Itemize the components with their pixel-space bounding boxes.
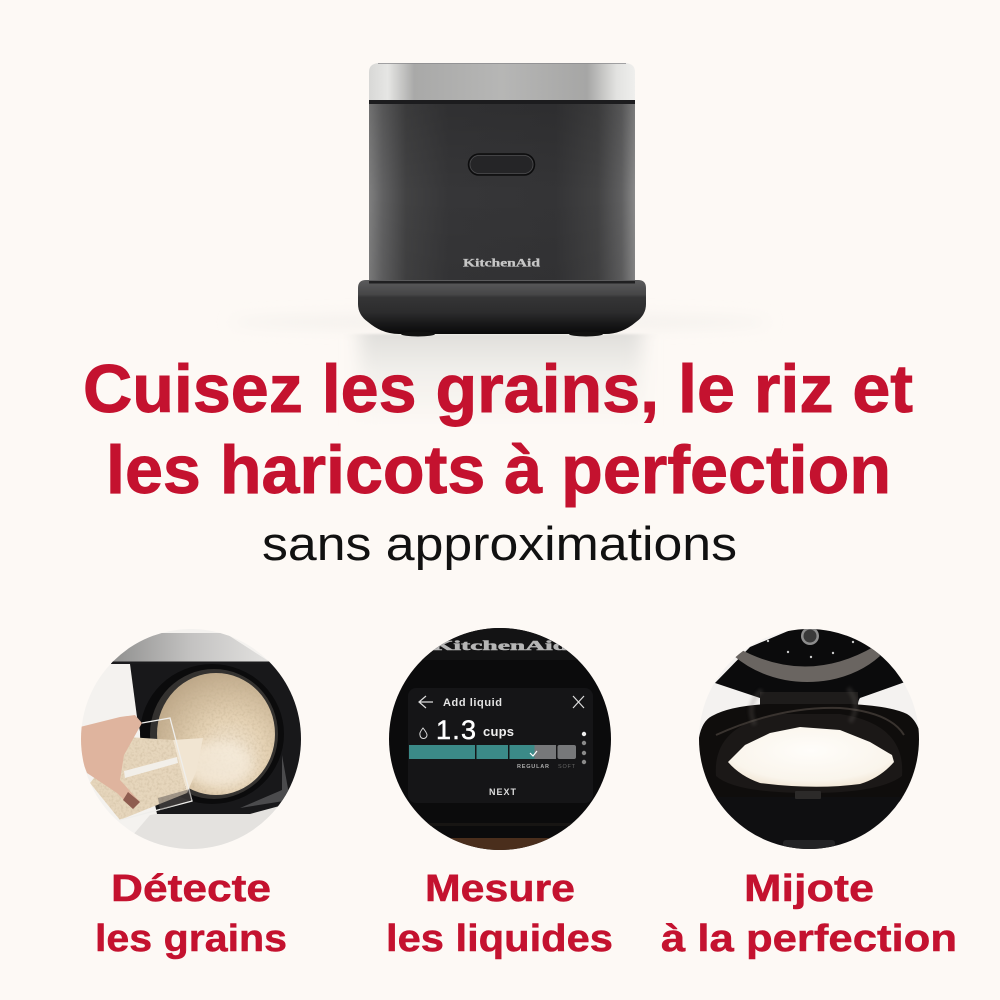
label	[95, 868, 287, 960]
title: les haricots à perfection	[106, 432, 891, 508]
brand logo: KitchenAid	[463, 258, 541, 270]
label: Mijote	[744, 868, 874, 910]
photo: control screen: NEXT	[489, 787, 516, 797]
photo: control screen: SOFT	[558, 764, 576, 770]
title: Cuisez les grains, le riz et	[83, 351, 913, 427]
drop icon	[420, 728, 427, 739]
photo: pouring rice into cooker	[80, 628, 302, 850]
cooker bowl	[698, 704, 922, 802]
photo: control screen: KitchenAid	[432, 639, 568, 654]
steam	[751, 688, 856, 725]
hand	[80, 715, 142, 809]
photo: control screen: cups	[483, 724, 514, 739]
photo: control screen: Add liquid	[443, 697, 502, 709]
measuring cup with rice	[90, 737, 187, 820]
page dots	[582, 732, 586, 736]
label: Détecte	[111, 868, 271, 910]
title	[83, 351, 913, 508]
label: Mesure	[425, 868, 575, 910]
photo: control screen: 1.3	[436, 715, 476, 745]
open lid	[715, 629, 904, 704]
label: les grains	[95, 918, 287, 960]
back arrow	[419, 696, 433, 708]
panel: mesure les liquides	[386, 628, 613, 960]
photo: control screen	[388, 628, 612, 852]
body button	[468, 154, 534, 175]
label	[386, 868, 613, 960]
close icon	[573, 696, 584, 708]
panel: mijote à la perfection	[661, 626, 957, 960]
liquid level bar	[409, 745, 576, 759]
label	[661, 868, 957, 960]
cooker base	[358, 280, 646, 334]
label: à la perfection	[661, 918, 957, 960]
photo: cooked rice in open cooker	[696, 626, 922, 852]
photo: control screen: REGULAR	[517, 764, 549, 770]
rice	[728, 727, 894, 787]
product: rice cooker	[230, 63, 770, 426]
label: les liquides	[386, 918, 613, 960]
subtitle: sans approximations	[262, 517, 737, 570]
panel: détecte les grains	[80, 628, 302, 960]
